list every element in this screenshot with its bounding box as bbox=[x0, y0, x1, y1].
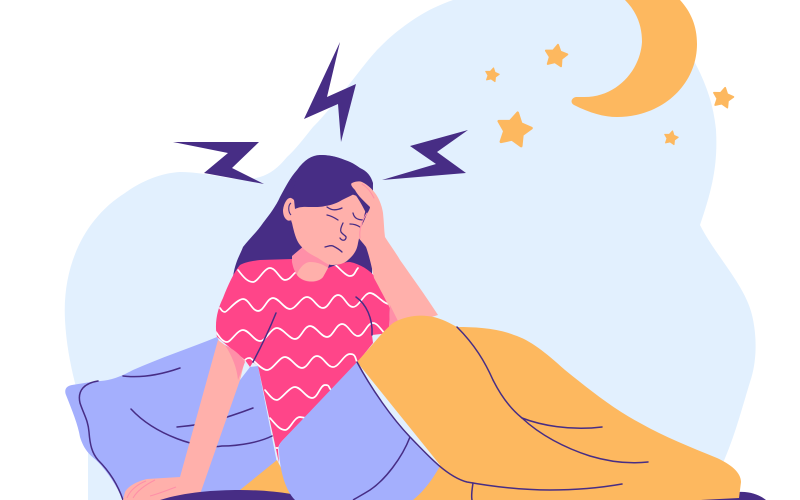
moon bbox=[572, 0, 697, 117]
dark bed base bbox=[160, 490, 766, 500]
lightning bolts bbox=[173, 42, 468, 184]
face shape bbox=[291, 190, 368, 265]
leg under blanket bbox=[279, 362, 440, 500]
arm: supporting bbox=[123, 340, 245, 500]
shirt bbox=[216, 259, 390, 463]
blanket fold lines bbox=[357, 327, 648, 500]
ear bbox=[283, 198, 296, 221]
blanket bbox=[357, 316, 741, 500]
arm and hand on forehead bbox=[351, 181, 438, 333]
blanket: lower left fold bbox=[240, 460, 330, 500]
sleeve seams bbox=[253, 297, 372, 362]
hair bbox=[233, 155, 373, 285]
fringe bbox=[293, 155, 373, 215]
pillow bbox=[65, 337, 300, 500]
stars bbox=[484, 43, 735, 147]
neck bbox=[292, 245, 330, 282]
facial features bbox=[325, 207, 364, 252]
shirt wave pattern bbox=[216, 265, 389, 448]
face bbox=[283, 155, 373, 265]
